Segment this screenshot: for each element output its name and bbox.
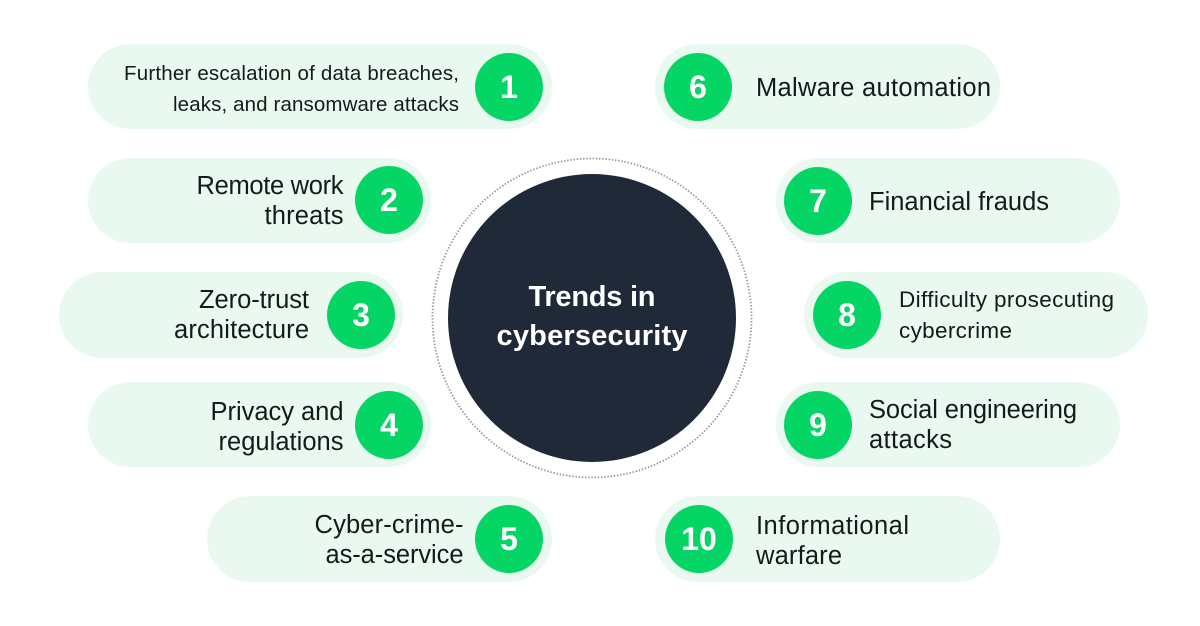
item 5: Cyber-crime- [314, 511, 464, 539]
item 2: 2 [380, 182, 398, 218]
item 9: Social engineering [869, 396, 1077, 424]
item 8: cybercrime [899, 318, 1012, 343]
item 9: 9 [809, 407, 827, 443]
item 10: Informational [756, 512, 909, 540]
item 2: threats [264, 202, 344, 230]
central circle: Trends in [528, 281, 656, 313]
item 3: 3 [352, 297, 370, 333]
item 4 [88, 382, 431, 467]
item 6 [655, 44, 1000, 129]
item 1: leaks, and ransomware attacks [173, 93, 459, 116]
item 1: Further escalation of data breaches, [124, 62, 459, 85]
item 9: attacks [869, 426, 952, 454]
dotted ring [432, 158, 752, 478]
item 4: regulations [218, 428, 344, 456]
item 3: architecture [174, 316, 309, 344]
item 7: Financial frauds [869, 188, 1049, 216]
item 8 [804, 272, 1148, 358]
item 7: 7 [809, 183, 827, 219]
item 8: 8 [838, 297, 856, 333]
item 7 [776, 158, 1120, 243]
item 3: Zero-trust [199, 286, 309, 314]
item 5 [207, 496, 552, 582]
central circle [448, 174, 736, 462]
item 9 [776, 382, 1120, 467]
item 4: 4 [380, 407, 398, 443]
item 10 [655, 496, 1000, 582]
item 2 [88, 158, 431, 243]
item 6: 6 [689, 69, 707, 105]
item 2: Remote work [196, 172, 344, 200]
item 5: as-a-service [326, 541, 464, 569]
item 4: Privacy and [210, 398, 344, 426]
item 10: warfare [755, 542, 842, 570]
item 6: Malware automation [756, 74, 991, 102]
item 3 [59, 272, 403, 358]
central circle: cybersecurity [496, 320, 688, 352]
item 1 [88, 44, 552, 129]
item 8: Difficulty prosecuting [899, 287, 1114, 312]
item 10: 10 [681, 521, 717, 557]
item 5: 5 [500, 521, 518, 557]
item 1: 1 [500, 69, 518, 105]
